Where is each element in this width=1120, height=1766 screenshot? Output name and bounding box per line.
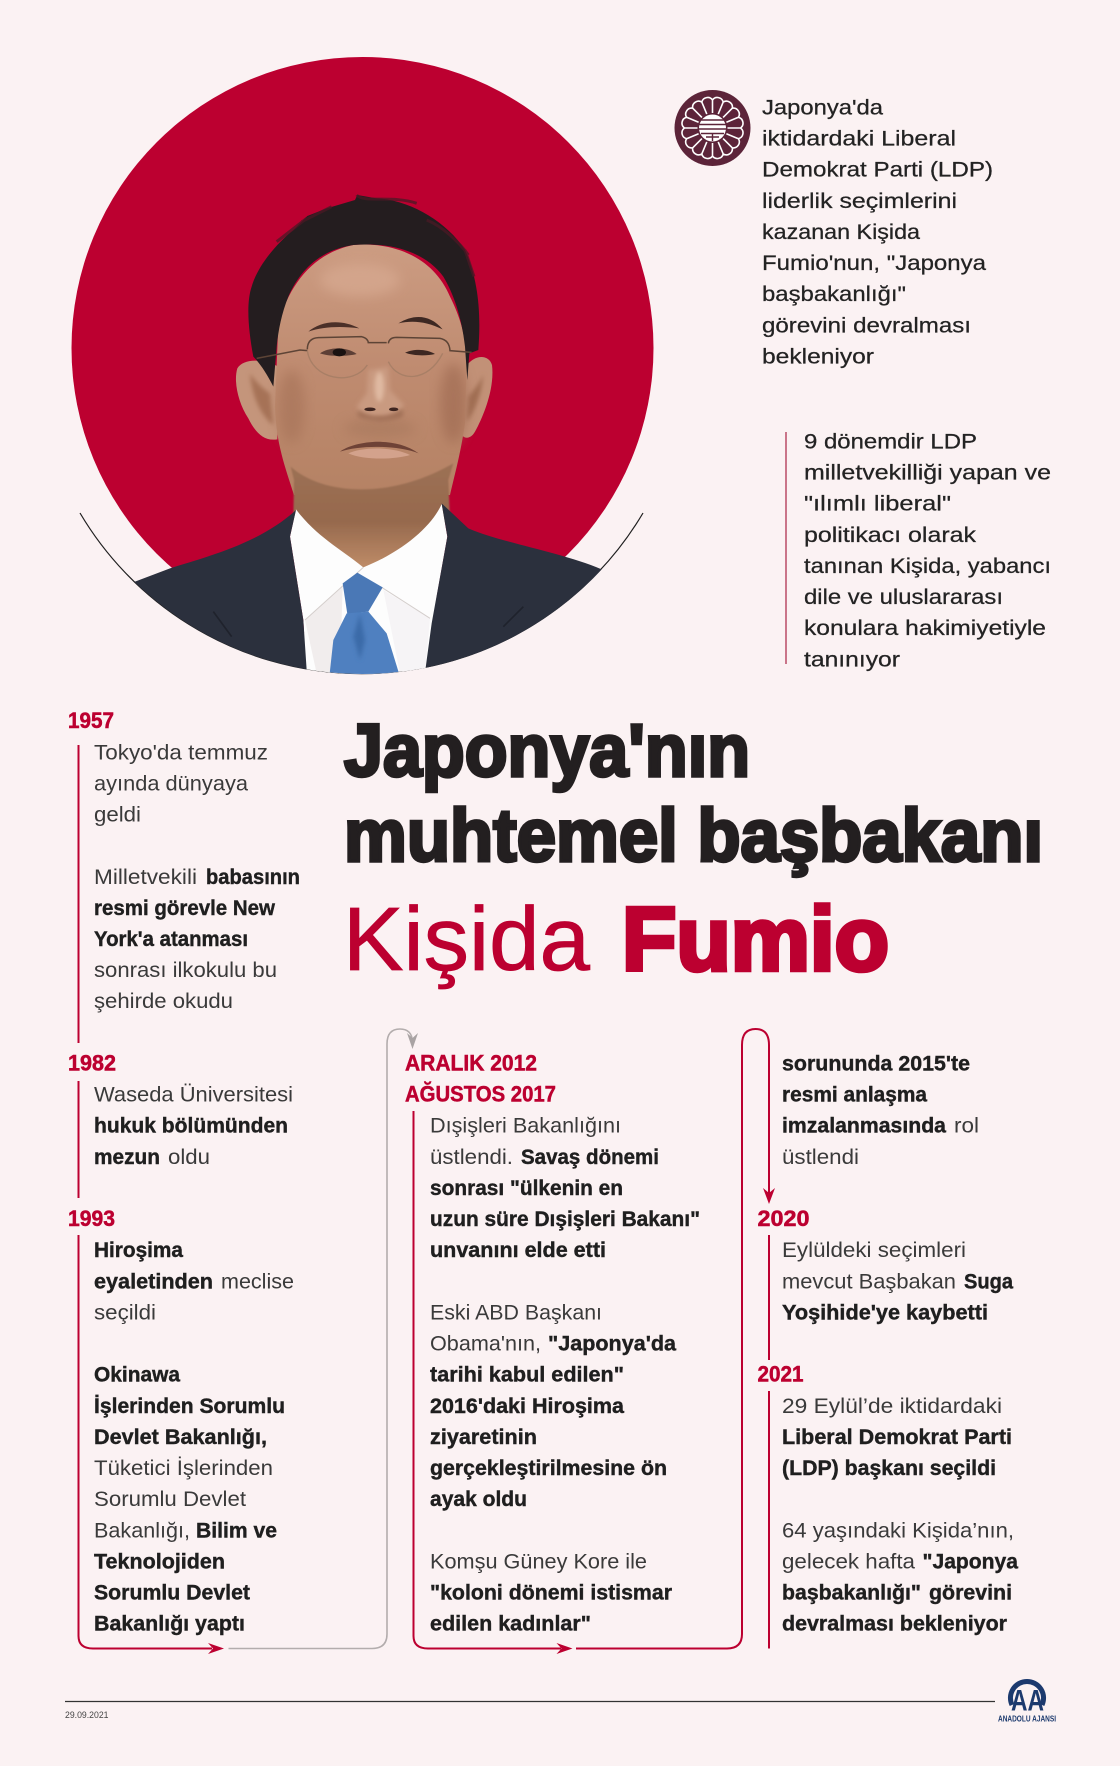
- 1957 entry: şehirde okudu: [94, 990, 233, 1013]
- 1982 entry: mezun: [94, 1146, 160, 1169]
- portrait of Kishida: [120, 195, 620, 680]
- column 2 text: gerçekleştirilmesine ön: [430, 1457, 667, 1480]
- 1957 entry: babasının: [206, 866, 300, 889]
- 2021 entry: [758, 1362, 1018, 1648]
- intro text block: Japonya'da: [762, 96, 883, 120]
- 2020 entry: Yoşihide'ye kaybetti: [782, 1301, 988, 1324]
- column 2 text: Dışişleri Bakanlığını: [430, 1115, 621, 1138]
- column 2 text: "Japonya'da: [548, 1333, 676, 1356]
- column 2 text: üstlendi.: [430, 1146, 513, 1169]
- 1982 entry: Waseda Üniversitesi: [94, 1084, 293, 1107]
- 1957 entry: York'a atanması: [94, 928, 248, 951]
- 2021 entry: görevini: [929, 1582, 1012, 1604]
- 2021 entry: (LDP) başkanı seçildi: [782, 1457, 996, 1480]
- 1993 entry: seçildi: [94, 1301, 156, 1324]
- 2021 entry: 29 Eylül’de iktidardaki: [782, 1395, 1002, 1418]
- 1982 entry: 1982: [68, 1050, 116, 1076]
- 2021 entry: Liberal Demokrat Parti: [782, 1426, 1012, 1449]
- black arc under portrait: [80, 513, 643, 674]
- hair: [248, 195, 479, 387]
- 1957 entry: 1957: [68, 708, 114, 733]
- 2021 entry: "Japonya: [922, 1550, 1018, 1573]
- arrow: column 2 to column 3: [414, 1029, 775, 1654]
- intro text block: kazanan Kişida: [762, 221, 920, 244]
- 1957 entry: sonrası ilkokulu bu: [94, 959, 277, 982]
- footer rule: [65, 1700, 995, 1702]
- 2021 entry: 64 yaşındaki Kişida’nın,: [782, 1519, 1014, 1542]
- 1993 entry: Okinawa: [94, 1364, 180, 1387]
- central seal: [699, 114, 726, 142]
- nose and mouth: [357, 367, 404, 417]
- intro text block: bekleniyor: [762, 346, 874, 368]
- date: 29.09.2021: [65, 1710, 108, 1720]
- column 2 text: unvanını elde etti: [430, 1239, 606, 1262]
- intro text block: Fumio'nun, "Japonya: [762, 252, 986, 275]
- vertical rule: [785, 432, 787, 664]
- 1957 entry: resmi görevle New: [94, 897, 276, 920]
- column 2 text: uzun süre Dışişleri Bakanı": [430, 1208, 700, 1231]
- continued text: sorununda 2015'te: [782, 1052, 970, 1076]
- column 2 text: 2016'daki Hiroşima: [430, 1395, 624, 1418]
- biography text block with rule: tanınıyor: [804, 648, 900, 671]
- 2021 entry: 2021: [758, 1362, 804, 1387]
- biography text block with rule: tanınan Kişida, yabancı: [804, 555, 1051, 578]
- intro text block: [762, 96, 993, 368]
- 1993 entry: Teknolojiden: [94, 1550, 225, 1573]
- 1993 entry: [68, 1206, 294, 1636]
- party emblem: [674, 90, 750, 166]
- column 2 text: ziyaretinin: [430, 1426, 537, 1449]
- 2021 entry: başbakanlığı": [782, 1582, 921, 1604]
- Anadolu Ajansi logo: [998, 1681, 1056, 1724]
- column 2 text: edilen kadınlar": [430, 1613, 591, 1636]
- column 2 text: Obama'nın,: [430, 1333, 541, 1356]
- head: ears, face, hair, glasses: [236, 195, 492, 495]
- biography text block with rule: politikacı olarak: [804, 524, 977, 547]
- 1993 entry: Hiroşima: [94, 1239, 183, 1262]
- 1993 entry: Bakanlığı yaptı: [94, 1613, 245, 1636]
- biography text block with rule: 9 dönemdir LDP: [804, 430, 977, 454]
- 1982 entry: [68, 1050, 293, 1198]
- continued text: üstlendi: [782, 1146, 859, 1169]
- 1993 entry: Tüketici İşlerinden: [94, 1457, 273, 1480]
- 1993 entry: 1993: [68, 1206, 115, 1231]
- 1993 entry: Devlet Bakanlığı,: [94, 1426, 267, 1449]
- eyebrows: [308, 322, 359, 332]
- 2020 entry: [758, 1206, 1013, 1360]
- biography text block with rule: konulara hakimiyetiyle: [804, 617, 1046, 640]
- title: Japonya'nın: [344, 709, 750, 792]
- column 2 text: sonrası "ülkenin en: [430, 1177, 623, 1200]
- intro text block: iktidardaki Liberal: [762, 128, 956, 151]
- column 2 text: ayak oldu: [430, 1488, 527, 1511]
- column 2 text: Komşu Güney Kore ile: [430, 1550, 647, 1573]
- intro text block: Demokrat Parti (LDP): [762, 159, 993, 182]
- 1993 entry: meclise: [221, 1270, 294, 1293]
- 1993 entry: eyaletinden: [94, 1270, 213, 1293]
- 1993 entry: Bakanlığı,: [94, 1519, 190, 1542]
- timeline column 2: AĞUSTOS 2017: [405, 1082, 556, 1107]
- Anadolu Ajansi logo: ANADOLU AJANSI: [998, 1714, 1056, 1724]
- eyes: [320, 348, 357, 356]
- timeline column 3: [758, 1052, 1018, 1648]
- continued text: resmi anlaşma: [782, 1084, 927, 1107]
- red sun circle: [72, 57, 654, 639]
- Anadolu Ajansi logo: AA: [1011, 1684, 1044, 1718]
- column 2 text: [430, 1115, 700, 1636]
- 1957 entry: geldi: [94, 804, 141, 826]
- 1993 entry: Sorumlu Devlet: [94, 1582, 250, 1604]
- 1993 entry: Bilim ve: [196, 1519, 277, 1542]
- 2020 entry: 2020: [758, 1206, 810, 1231]
- biography text block with rule: dile ve uluslararası: [804, 586, 1003, 609]
- biography text block with rule: "ılımlı liberal": [804, 493, 951, 516]
- portrait on red sun disc: [72, 57, 654, 680]
- continued text: imzalanmasında: [782, 1115, 946, 1138]
- date range heading: ARALIK 2012: [405, 1050, 537, 1076]
- title: Fumio: [622, 890, 889, 990]
- 1993 entry: İşlerinden Sorumlu: [94, 1395, 285, 1418]
- 2020 entry: Eylüldeki seçimleri: [782, 1239, 966, 1262]
- arrow: column 1 to column 2: [78, 1029, 418, 1654]
- title: Kişida: [343, 890, 591, 990]
- intro text block: liderlik seçimlerini: [762, 190, 957, 213]
- 1993 entry: Sorumlu Devlet: [94, 1488, 246, 1511]
- biography text block with rule: [786, 430, 1051, 671]
- column 2 text: Eski ABD Başkanı: [430, 1301, 602, 1324]
- intro text block: başbakanlığı": [762, 283, 906, 306]
- 2021 entry: gelecek hafta: [782, 1550, 915, 1573]
- column 2 text: tarihi kabul edilen": [430, 1364, 624, 1387]
- continued text: [782, 1052, 979, 1169]
- 1957 entry: ayında dünyaya: [94, 772, 248, 795]
- timeline column 1: [68, 708, 300, 1636]
- 1957 entry: Milletvekili: [94, 866, 197, 889]
- glasses frame: [257, 337, 472, 358]
- 1957 entry: [68, 708, 300, 1043]
- column 2 text: "koloni dönemi istismar: [430, 1582, 672, 1604]
- 1982 entry: hukuk bölümünden: [94, 1115, 288, 1138]
- 2020 entry: Suga: [964, 1270, 1013, 1293]
- 1957 entry: Tokyo'da temmuz: [94, 741, 268, 764]
- title: [343, 709, 1043, 990]
- 1982 entry: oldu: [168, 1146, 210, 1169]
- timeline column 2: [405, 1050, 700, 1636]
- continued text: rol: [954, 1115, 979, 1138]
- biography text block with rule: milletvekilliği yapan ve: [804, 462, 1051, 485]
- 2020 entry: mevcut Başbakan: [782, 1270, 956, 1293]
- intro text block: görevini devralması: [762, 314, 971, 337]
- title: muhtemel başbakanı: [344, 794, 1043, 877]
- chrysanthemum petals: [682, 98, 743, 158]
- bust: neck, suit, shirt and tie: [120, 463, 620, 680]
- column 2 text: Savaş dönemi: [521, 1146, 659, 1169]
- 2021 entry: devralması bekleniyor: [782, 1613, 1007, 1636]
